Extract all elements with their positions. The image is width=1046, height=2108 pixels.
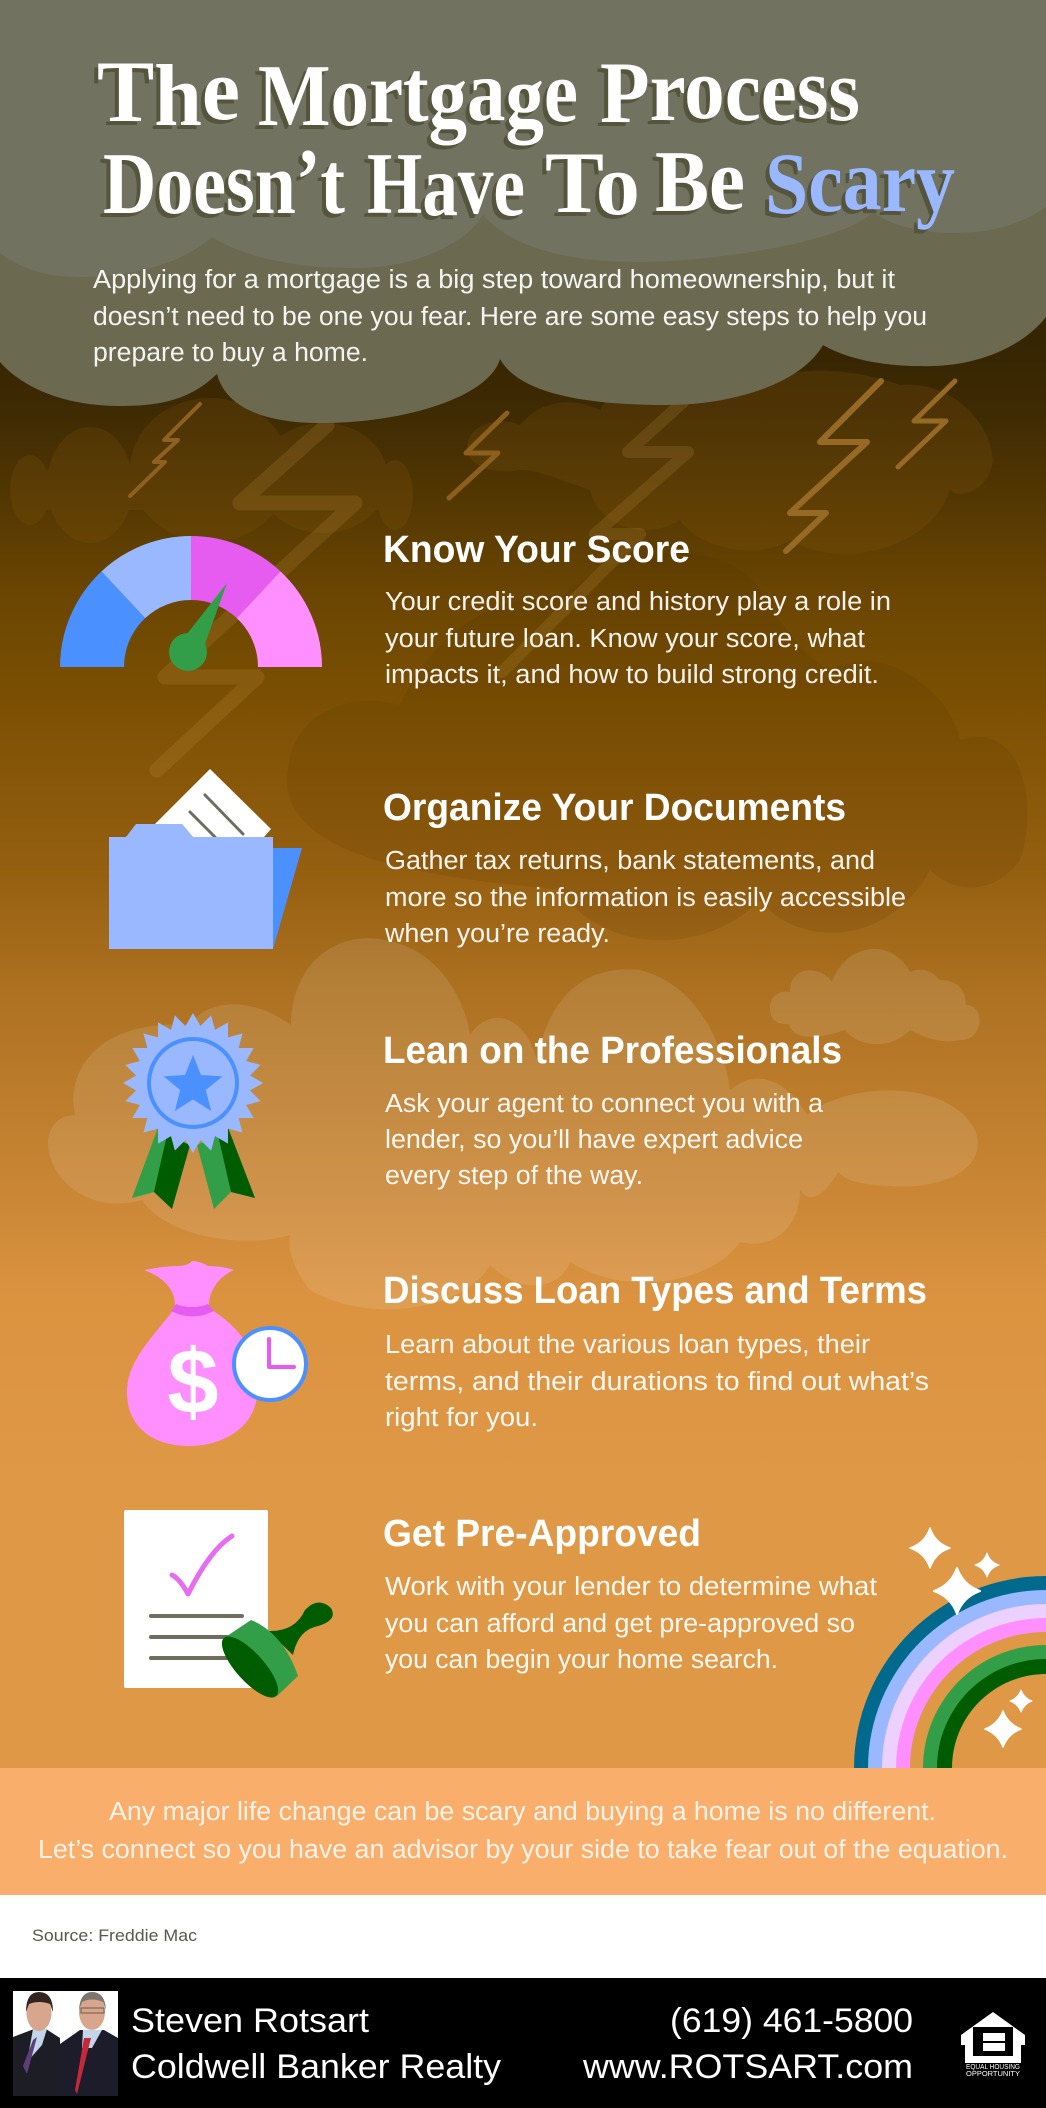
equal housing logo: OPPORTUNITY [966, 2071, 1020, 2078]
background: stormy sky gradient [0, 200, 1046, 1770]
step 4 text: discuss loan types and terms: right for you. [385, 1404, 538, 1432]
agent footer bar: www.ROTSART.com [582, 2048, 913, 2086]
title: To [545, 135, 640, 234]
agent photo [13, 1991, 118, 2096]
background: dark clouds behind lightning [10, 371, 993, 554]
title: The [97, 42, 240, 145]
step 2 text: organize your documents [383, 787, 906, 948]
lightning bolt: top right tall [786, 381, 881, 551]
call to action band: Let’s connect so you have an advisor by your side to take fear out of the equation. [38, 1836, 1008, 1864]
agent footer bar: (619) 461-5800 [670, 2002, 913, 2040]
title: Have [367, 136, 525, 235]
icon: money bag with clock [127, 1261, 306, 1446]
intro text: doesn’t need to be one you fear. Here are some easy steps to help you [93, 303, 927, 331]
call to action band: Any major life change can be scary and buying a home is no different. [109, 1798, 936, 1826]
step 5 text: get pre-approved: Work with your lender to determine what [385, 1573, 877, 1601]
title: Scary [765, 132, 955, 233]
icon: award ribbon [123, 991, 285, 1209]
title: Doesn’t [103, 132, 345, 233]
title [97, 41, 955, 235]
equal housing logo: EQUAL HOUSING [966, 2064, 1020, 2071]
step 2 text: organize your documents: when you’re ready. [384, 920, 610, 948]
icon: document folder [109, 769, 302, 949]
step 2 text: organize your documents: Organize Your Documents [383, 787, 846, 829]
step 4 text: discuss loan types and terms: terms, and their durations to find out what’s [385, 1368, 929, 1396]
icon: sparkles [910, 1528, 1032, 1747]
step 2 text: organize your documents: more so the information is easily accessible [385, 884, 906, 912]
step 5 text: get pre-approved [383, 1513, 877, 1674]
step 3 text: lean on the professionals [383, 1030, 842, 1190]
background: pale clouds [48, 938, 980, 1309]
step 3 text: lean on the professionals: Lean on the Professionals [383, 1030, 842, 1072]
step 1 text: know your score: your future loan. Know your score, what [385, 625, 865, 653]
step 4 text: discuss loan types and terms [383, 1270, 929, 1432]
icon: rainbow [854, 1576, 1046, 1960]
lightning bolt: top right small [898, 381, 955, 467]
intro text: prepare to buy a home. [93, 339, 368, 367]
step 5 text: get pre-approved: Get Pre-Approved [383, 1513, 701, 1555]
background: big faded lightning bolts [157, 402, 688, 770]
icon: money bag with clock: $ [167, 1331, 219, 1433]
agent footer bar: Coldwell Banker Realty [131, 2048, 501, 2086]
equal housing logo [961, 2012, 1025, 2078]
agent footer bar: Steven Rotsart [131, 2002, 370, 2040]
step 1 text: know your score [383, 529, 891, 689]
source note [0, 1895, 1046, 1978]
storm cloud: rear layer [0, 0, 1046, 423]
step 4 text: discuss loan types and terms: Discuss Loan Types and Terms [383, 1270, 927, 1312]
storm cloud: front layer [0, 0, 1046, 277]
title: Process [600, 41, 860, 142]
step 5 text: get pre-approved: you can begin your home search. [385, 1646, 778, 1674]
agent footer bar [0, 1978, 1046, 2108]
step 1 text: know your score: impacts it, and how to build strong credit. [385, 661, 879, 689]
gauge needle [169, 583, 227, 671]
stamp [213, 1602, 333, 1705]
step 3 text: lean on the professionals: every step of the way. [385, 1162, 643, 1190]
rosette [123, 991, 285, 1160]
lightning bolt: top left small [130, 404, 200, 496]
icon: credit score gauge [60, 536, 322, 671]
call to action band [0, 1768, 1046, 1895]
step 2 text: organize your documents: Gather tax returns, bank statements, and [385, 847, 875, 875]
step 3 text: lean on the professionals: Ask your agent to connect you with a [385, 1090, 824, 1118]
intro text: Applying for a mortgage is a big step toward homeownership, but it [93, 266, 895, 294]
step 1 text: know your score: Your credit score and history play a role in [385, 588, 891, 616]
title: Mortgage [258, 43, 578, 146]
step 1 text: know your score: Know Your Score [383, 529, 690, 571]
title: Be [655, 132, 745, 231]
step 5 text: get pre-approved: you can afford and get pre-approved so [385, 1610, 855, 1638]
step 3 text: lean on the professionals: lender, so you’ll have expert advice [385, 1126, 803, 1154]
background: shadowy large cloud [287, 553, 1028, 940]
step 4 text: discuss loan types and terms: Learn about the various loan types, their [385, 1331, 871, 1359]
source note: Source: Freddie Mac [32, 1926, 198, 1945]
lightning bolt: top centre small [449, 413, 507, 498]
icon: approved document with stamp [124, 1510, 333, 1705]
intro text [93, 266, 927, 367]
